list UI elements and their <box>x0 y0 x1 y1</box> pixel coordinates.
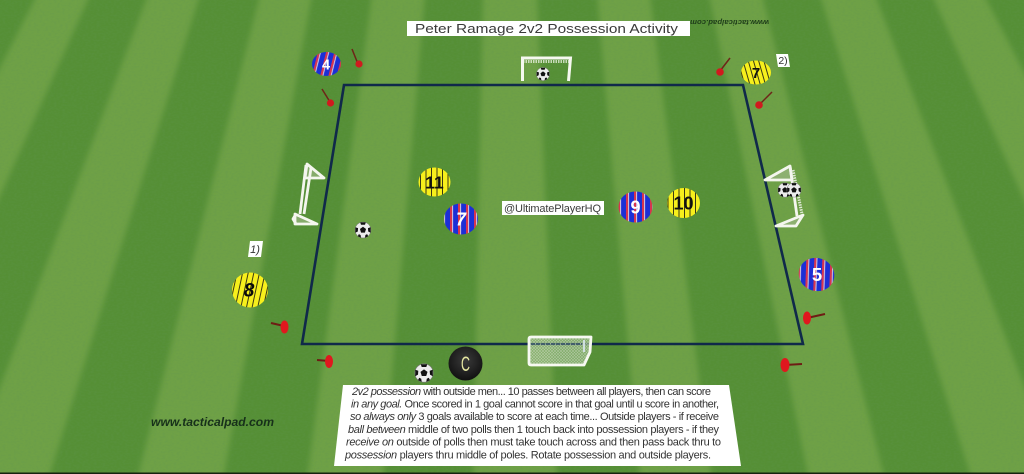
instructions text box: ball between middle of two polls then 1 touch back into possession players - if they <box>348 424 720 436</box>
player: blue 5: 5 <box>812 264 822 285</box>
pole marker: bottom right lower <box>780 358 802 372</box>
instructions text box <box>334 385 741 466</box>
watermark: www.tacticalpad.com <box>151 417 274 429</box>
ball: left of pitch <box>355 222 371 238</box>
mirrored watermark: www.tacticalpad.com <box>690 18 769 27</box>
pole marker: top right outer <box>716 58 730 76</box>
player: blue 9 <box>618 192 652 222</box>
player: blue 4 <box>312 52 341 76</box>
player: blue 7 <box>444 204 478 234</box>
instructions text box: in any goal. Once scored in 1 goal cannot score in that goal until u score in another, <box>351 398 719 410</box>
handle label: @UltimatePlayerHQ <box>504 203 601 215</box>
player: blue 5 <box>794 253 839 296</box>
playing area boundary <box>302 85 803 344</box>
instructions text box: receive on outside of polls then must take touch across and then pass back thru to <box>346 436 721 448</box>
player: yellow 7: 7 <box>752 65 760 82</box>
goal: top <box>522 58 570 81</box>
goal: left <box>293 164 324 224</box>
player: yellow 8 <box>232 272 268 308</box>
pole marker: top left outer <box>352 49 363 68</box>
instructions text box: 2v2 possession with outside men... 10 passes between all players, then can score <box>351 386 711 398</box>
pole marker: bottom left lower <box>317 355 333 368</box>
label: 1): 1) <box>250 244 260 256</box>
label: 2): 2) <box>778 55 788 67</box>
player: blue 7: 7 <box>456 210 467 230</box>
label: 2) <box>776 54 790 67</box>
pole marker: top left inner <box>322 89 334 107</box>
ball: top goal <box>536 67 550 81</box>
goal: bottom <box>529 337 591 365</box>
pole marker: bottom right upper <box>803 312 825 324</box>
player: yellow 8: 8 <box>244 280 255 302</box>
pole marker: top right inner <box>755 92 772 109</box>
pole marker: bottom left upper <box>271 320 288 334</box>
instructions text box: so always only 3 goals available to score at each time... Outside players - if receive <box>350 411 719 423</box>
coach marker <box>448 346 482 380</box>
player: yellow 10: 10 <box>673 194 694 214</box>
title: Peter Ramage 2v2 Possession Activity <box>415 21 679 36</box>
instructions text box: possession players thru middle of poles. Rotate possession and outside players. <box>344 450 711 462</box>
player: yellow 11 <box>418 168 450 196</box>
balls: right goal <box>778 183 801 197</box>
goal: right <box>765 166 803 226</box>
player: yellow 7 <box>741 60 771 84</box>
player: yellow 11: 11 <box>425 172 444 192</box>
ball: next to coach <box>415 364 433 382</box>
label: 1) <box>248 241 263 257</box>
player: blue 9: 9 <box>630 198 641 218</box>
player: blue 4: 4 <box>322 58 330 74</box>
player: yellow 10 <box>667 188 700 218</box>
coach marker: C <box>461 353 470 376</box>
